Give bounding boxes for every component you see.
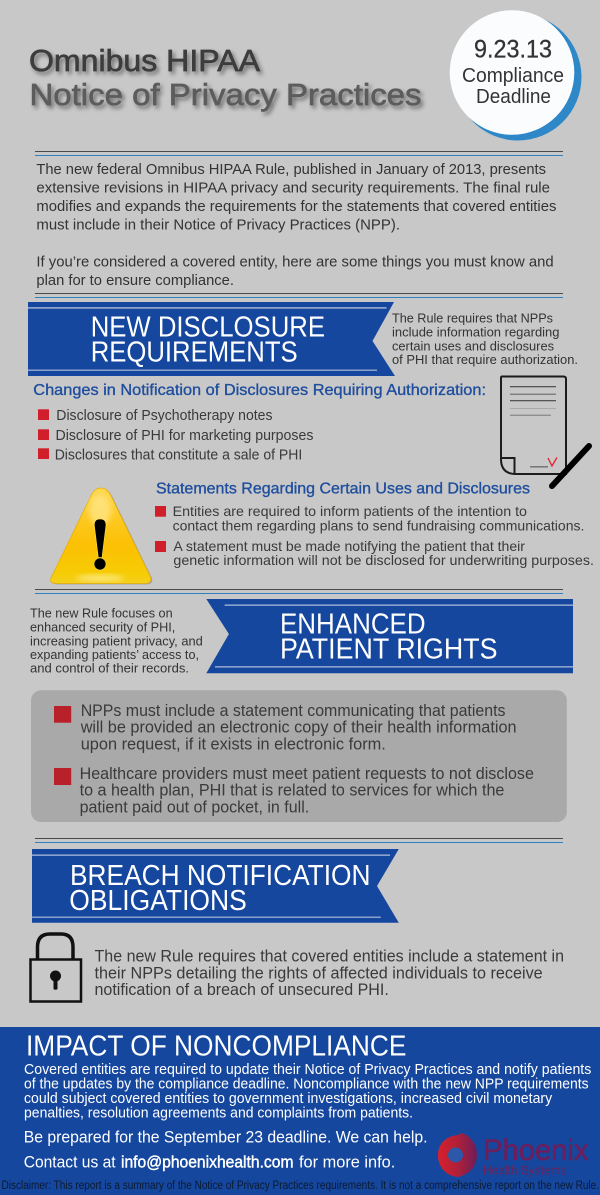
banner: new disclosure requirements: NEW DISCLOSURE [91, 312, 325, 344]
call to action: Contact us at [24, 1153, 116, 1172]
panel: patient rights: NPPs must include a statement communicating that patients [81, 702, 505, 720]
disclosure note: certain uses and disclosures [392, 338, 554, 353]
logo: Phoenix Health Systems [438, 1133, 588, 1177]
deadline badge: Compliance [462, 65, 564, 87]
panel: patient rights [31, 690, 567, 822]
authorization list [38, 408, 313, 463]
panel: patient rights: will be provided an electronic copy of their health information [80, 719, 517, 737]
disclosure note: of PHI that require authorization. [392, 352, 578, 367]
banner: breach notification obligations: OBLIGATIONS [69, 885, 247, 917]
deadline badge: 9.23.13 [474, 36, 552, 64]
authorization list: Disclosure of PHI for marketing purposes [56, 428, 313, 444]
statements list [155, 503, 594, 568]
authorization list: Disclosures that constitute a sale of PHI [55, 447, 302, 463]
panel: patient rights: to a health plan, PHI that is related to services for which the [80, 782, 504, 800]
banner: enhanced patient rights: PATIENT RIGHTS [280, 633, 498, 665]
logo: Phoenix Health Systems: Health Systems [483, 1162, 567, 1177]
enhanced rights note: and control of their records. [30, 661, 189, 676]
impact text: of the updates by the compliance deadline. Noncompliance with the new NPP requirements [24, 1076, 589, 1092]
title: Omnibus HIPAA [29, 43, 260, 78]
breach text: their NPPs detailing the rights of affected individuals to receive [94, 964, 543, 982]
impact text: could subject covered entities to government investigations, increased civil monetary [24, 1091, 553, 1107]
call to action: Be prepared for the September 23 deadline. We can help. [24, 1128, 427, 1147]
heading: changes in notification: Changes in Notification of Disclosures Requiring Authorization: [33, 382, 486, 399]
intro text: modifies and expands the requirements for the statements that covered entities [36, 198, 556, 215]
banner: breach notification obligations: BREACH NOTIFICATION [70, 860, 370, 892]
banner: breach notification obligations [32, 849, 399, 923]
panel: patient rights: patient paid out of pocket, in full. [80, 798, 309, 816]
disclosure note: The Rule requires that NPPs [392, 311, 553, 326]
deadline badge [450, 10, 582, 141]
title: Notice of Privacy Practices [30, 77, 422, 112]
logo: Phoenix Health Systems: Phoenix [483, 1134, 588, 1167]
call to action: for more info. [299, 1153, 395, 1172]
intro text: If you’re considered a covered entity, here are some things you must know and [36, 254, 554, 271]
enhanced rights note: expanding patients’ access to, [30, 647, 199, 662]
icon: signed document [501, 376, 589, 486]
intro text: plan for to ensure compliance. [36, 272, 234, 289]
panel: impact of noncompliance [0, 1027, 600, 1195]
icon: warning triangle [51, 488, 152, 584]
banner: new disclosure requirements [28, 302, 395, 376]
impact text: Covered entities are required to update their Notice of Privacy Practices and notify patients [24, 1062, 591, 1078]
heading: impact: IMPACT OF NONCOMPLIANCE [26, 1031, 406, 1063]
impact text: penalties, resolution agreements and complaints from patients. [24, 1106, 413, 1122]
breach text: notification of a breach of unsecured PHI. [94, 981, 389, 999]
authorization list: Disclosure of Psychotherapy notes [56, 408, 272, 424]
panel: patient rights: upon request, if it exists in electronic form. [81, 735, 386, 753]
intro text: must include in their Notice of Privacy Practices (NPP). [36, 217, 400, 234]
deadline badge: Deadline [476, 86, 551, 108]
title [29, 43, 422, 112]
banner: enhanced patient rights [206, 599, 573, 673]
call to action: info@phoenixhealth.com [121, 1153, 294, 1172]
call to action [24, 1128, 427, 1172]
enhanced rights note: The new Rule focuses on [30, 606, 173, 621]
enhanced rights note: increasing patient privacy, and [30, 633, 203, 648]
statements list: A statement must be made notifying the patient that their [173, 538, 525, 554]
disclosure note: include information regarding [392, 324, 560, 339]
intro text: The new federal Omnibus HIPAA Rule, published in January of 2013, presents [36, 161, 546, 178]
breach text: The new Rule requires that covered entities include a statement in [94, 948, 564, 966]
statements list: Entities are required to inform patients of the intention to [173, 503, 527, 519]
panel: patient rights: Healthcare providers must meet patient requests to not disclose [80, 765, 534, 783]
enhanced rights note: enhanced security of PHI, [30, 619, 175, 634]
heading: statements: Statements Regarding Certain Uses and Disclosures [156, 480, 530, 497]
intro text: extensive revisions in HIPAA privacy and security requirements. The final rule [36, 180, 550, 197]
statements list: genetic information will not be disclosed for underwriting purposes. [173, 552, 594, 568]
impact text [24, 1062, 591, 1122]
banner: new disclosure requirements: REQUIREMENTS [91, 337, 298, 369]
statements list: contact them regarding plans to send fundraising communications. [173, 517, 584, 533]
enhanced rights note [30, 606, 203, 676]
intro text [36, 161, 556, 289]
breach text [94, 948, 564, 999]
icon: padlock [30, 934, 81, 1002]
banner: enhanced patient rights: ENHANCED [280, 608, 426, 640]
disclosure note [392, 311, 578, 367]
